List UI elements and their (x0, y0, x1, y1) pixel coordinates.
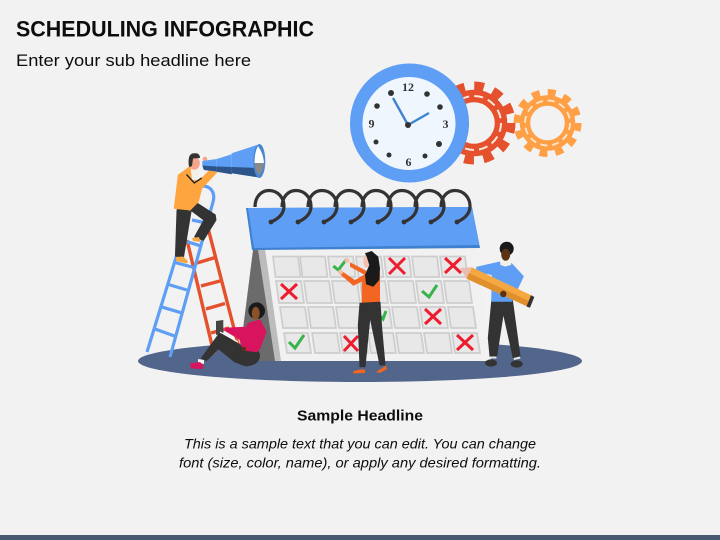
telescope (202, 144, 265, 178)
icon: red gear (437, 86, 511, 160)
person: man with telescope (174, 144, 265, 264)
body text (179, 435, 541, 471)
icon: wall clock (350, 64, 469, 182)
person: standing woman (338, 251, 387, 374)
body text: font (size, color, name), or apply any desired formatting. (179, 455, 541, 471)
title: SCHEDULING INFOGRAPHIC (16, 17, 314, 42)
bottom bar (0, 535, 720, 540)
calendar binding band (246, 207, 480, 250)
calendar page (258, 247, 491, 361)
calendar back cover (239, 250, 276, 361)
person: seated woman with laptop (190, 302, 266, 369)
blue ladder (147, 186, 214, 357)
calendar spiral rings (255, 190, 470, 222)
calendar (239, 190, 491, 361)
red crosses (281, 258, 473, 351)
body text: This is a sample text that you can edit. You can change (184, 435, 536, 451)
icon: wall clock: 9 (368, 116, 374, 130)
pencil (460, 267, 534, 308)
red ladder (187, 228, 238, 354)
ground ellipse (138, 340, 582, 382)
icon: orange gear (517, 92, 578, 154)
person: man with pencil (460, 242, 534, 368)
icon: wall clock: 3 (442, 117, 448, 131)
icon: wall clock: 12 (402, 80, 414, 94)
subtitle: Enter your sub headline here (16, 51, 251, 70)
icon: wall clock: 6 (406, 155, 412, 169)
sample headline: Sample Headline (297, 408, 423, 424)
green check marks (289, 259, 437, 348)
calendar grid (273, 256, 480, 353)
